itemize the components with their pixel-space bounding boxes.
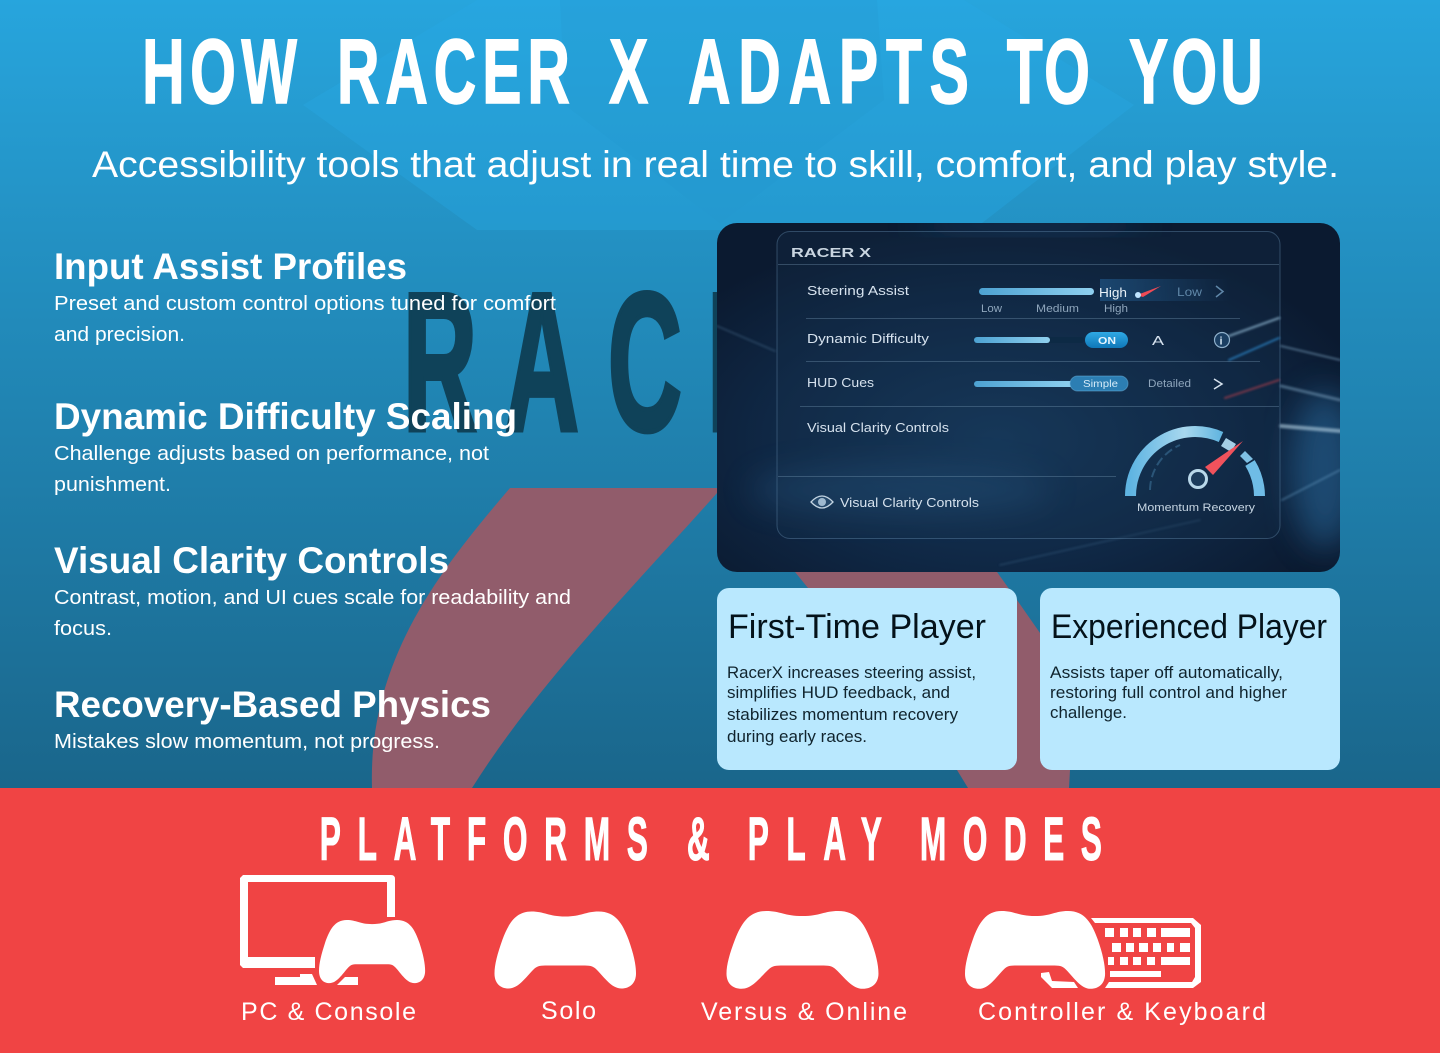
row: dynamic difficulty: i xyxy=(1220,336,1223,348)
row: steering assist: High xyxy=(1104,303,1128,315)
icon: controller and keyboard xyxy=(965,911,1201,989)
row: dynamic difficulty: A xyxy=(1152,333,1164,348)
icon: solo controller xyxy=(494,912,636,988)
background xyxy=(0,0,1440,788)
gauge: momentum recovery xyxy=(1130,432,1260,514)
background red slash left xyxy=(372,488,725,788)
feature: recovery-based physics: Recovery-Based Physics xyxy=(54,684,491,725)
feature: input assist profiles: Preset and custom control options tuned for comfort xyxy=(54,292,556,315)
panel logo: RACER X xyxy=(791,246,872,260)
row: steering assist: Low xyxy=(1177,285,1202,299)
row: hud cues: Detailed xyxy=(1148,378,1191,390)
platforms heading: PLAY xyxy=(748,806,882,874)
row: visual clarity with eye icon: Visual Clarity Controls xyxy=(840,495,980,510)
feature: dynamic difficulty scaling: punishment. xyxy=(54,473,171,496)
gauge: momentum recovery: Momentum Recovery xyxy=(1137,502,1256,514)
row: steering assist: Medium xyxy=(1036,303,1079,315)
row: steering assist xyxy=(807,279,1230,315)
platforms heading: MODES xyxy=(920,806,1102,874)
card: experienced player: restoring full control and higher xyxy=(1050,684,1288,702)
label: solo: Solo xyxy=(541,997,596,1025)
feature: visual clarity controls: focus. xyxy=(54,617,112,640)
feature: dynamic difficulty scaling: Challenge adjusts based on performance, not xyxy=(54,442,489,465)
feature: input assist profiles: Input Assist Profiles xyxy=(54,246,407,287)
feature: visual clarity controls: Visual Clarity Controls xyxy=(54,540,449,581)
feature: dynamic difficulty scaling: Dynamic Difficulty Scaling xyxy=(54,396,517,437)
label: versus and online: Versus & Online xyxy=(701,998,907,1026)
title: HOW xyxy=(142,21,297,123)
feature: recovery-based physics: Mistakes slow momentum, not progress. xyxy=(54,730,440,753)
card: first-time player xyxy=(717,588,1017,770)
label: controller and keyboard: Controller & Keyboard xyxy=(978,998,1266,1026)
title: YOU xyxy=(1129,21,1263,123)
card: first-time player: simplifies HUD feedback, and xyxy=(727,684,950,702)
row: steering assist: High xyxy=(1099,285,1127,300)
platforms heading: & xyxy=(687,806,710,874)
title: RACER xyxy=(337,21,570,123)
card: experienced player: Experienced Player xyxy=(1051,608,1327,646)
platforms heading: PLATFORMS xyxy=(320,806,648,874)
card: first-time player: RacerX increases steering assist, xyxy=(727,664,976,682)
row: hud cues: Simple xyxy=(1083,378,1118,390)
row: visual clarity heading: Visual Clarity Controls xyxy=(807,420,950,435)
title: X xyxy=(609,21,648,123)
watermark word: RACER X xyxy=(403,253,1056,473)
card: experienced player: challenge. xyxy=(1050,704,1127,722)
panel: platforms band xyxy=(0,788,1440,1053)
card: first-time player: stabilizes momentum recovery xyxy=(727,706,959,724)
row: steering assist: Steering Assist xyxy=(807,283,909,298)
subtitle: Accessibility tools that adjust in real time to skill, comfort, and play style. xyxy=(92,144,1339,185)
icon: versus controller xyxy=(726,911,878,989)
row: dynamic difficulty: Dynamic Difficulty xyxy=(807,331,930,346)
card: experienced player: Assists taper off automatically, xyxy=(1050,664,1283,682)
row: hud cues: HUD Cues xyxy=(807,375,875,390)
panel: game settings screenshot xyxy=(717,218,1359,572)
feature: dynamic difficulty scaling xyxy=(54,396,517,496)
title: ADAPTS xyxy=(688,21,969,123)
icon: monitor and controller xyxy=(240,875,425,985)
row: dynamic difficulty: ON xyxy=(1098,335,1116,347)
background red slash right xyxy=(795,572,1070,788)
feature: input assist profiles xyxy=(54,246,556,346)
card: experienced player xyxy=(1040,588,1340,770)
row: dynamic difficulty xyxy=(807,331,1230,348)
card: first-time player: during early races. xyxy=(727,728,867,746)
label: pc and console: PC & Console xyxy=(241,998,416,1026)
feature: visual clarity controls: Contrast, motion, and UI cues scale for readability and xyxy=(54,586,571,609)
row: hud cues xyxy=(807,375,1222,391)
title: TO xyxy=(1007,21,1090,123)
feature: visual clarity controls xyxy=(54,540,571,640)
background hexagon shape xyxy=(303,0,1134,230)
card: first-time player: First-Time Player xyxy=(728,608,986,646)
row: steering assist: Low xyxy=(981,303,1002,315)
feature: recovery-based physics xyxy=(54,684,491,753)
feature: input assist profiles: and precision. xyxy=(54,323,185,346)
